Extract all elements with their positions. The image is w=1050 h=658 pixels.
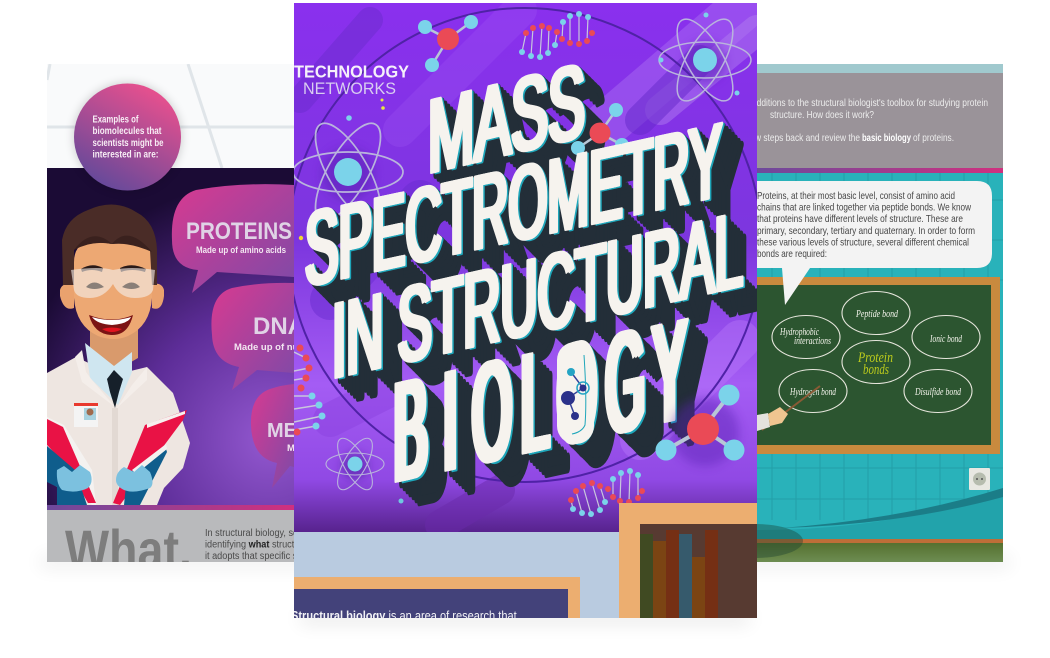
panel: center cover page xyxy=(288,3,764,623)
title line: MASS: MASS xyxy=(431,43,588,196)
bond labels: Hydrogen bond xyxy=(789,386,836,398)
DNA helix: left xyxy=(294,344,326,436)
ID badge xyxy=(74,403,98,427)
speech bubble text panel: Proteins, at their most basic level, consist of amino acid xyxy=(757,191,955,202)
title: Mass Spectrometry in Structural Biology xyxy=(304,38,764,538)
title line: MASS: MASS xyxy=(429,42,586,195)
title line: IN STRUCTURAL xyxy=(330,185,764,427)
circle callout: biomolecules that xyxy=(92,126,162,137)
speech bubble: proteins: PROTEINS xyxy=(186,218,292,245)
speech bubble text panel: primary, secondary, tertiary and quaternary. In order to form xyxy=(757,226,975,237)
neck xyxy=(90,330,138,366)
title line: BIOLOGY: BIOLOGY xyxy=(412,308,704,530)
speech bubble: DNA xyxy=(211,282,294,390)
speech bubble: membranes: Made xyxy=(287,443,311,454)
speech bubble text panel: these various levels of structure, several different chemical xyxy=(757,238,969,248)
title line: BIOLOGY: BIOLOGY xyxy=(398,291,691,513)
coat collar xyxy=(75,350,115,407)
speech bubble: DNA: DNA xyxy=(253,313,305,340)
bond labels xyxy=(779,308,962,398)
title line: MASS: MASS xyxy=(446,60,603,213)
card shadows xyxy=(40,556,1010,624)
safety glasses xyxy=(71,268,155,298)
title line: MASS: MASS xyxy=(427,43,584,196)
lower wall xyxy=(294,532,757,618)
title line: BIOLOGY: BIOLOGY xyxy=(403,299,695,521)
intro text: In structural biology, scientists are interested in xyxy=(205,527,394,539)
large orbit ring xyxy=(288,8,762,482)
circle callout xyxy=(74,84,181,190)
intro text: it adopts that specific structure xyxy=(205,550,329,562)
title line: MASS: MASS xyxy=(437,51,594,205)
lab ceiling background xyxy=(47,64,294,169)
bond ellipses xyxy=(772,292,980,412)
title line: MASS: MASS xyxy=(449,63,606,216)
atom: top right xyxy=(658,11,751,109)
left open book xyxy=(47,417,96,505)
intro text: identifying what structure a molecule has and why xyxy=(205,539,408,551)
title line: BIOLOGY: BIOLOGY xyxy=(409,305,701,527)
title line: BIOLOGY: BIOLOGY xyxy=(394,290,686,512)
small decorative dots xyxy=(299,98,404,504)
purple cover background xyxy=(294,3,757,533)
ears xyxy=(60,284,164,309)
speech bubble text panel xyxy=(740,181,992,305)
scientist character xyxy=(47,204,190,505)
speech bubble text panel: bonds are required: xyxy=(757,249,827,260)
molecule: bottom right xyxy=(656,384,744,466)
eyes xyxy=(86,282,140,289)
atom: left xyxy=(293,114,403,230)
logo: Technology Networks: TECHNOLOGY xyxy=(294,62,409,82)
pointer and hand xyxy=(757,386,820,431)
grey intro band xyxy=(757,73,1003,168)
circle callout: scientists might be xyxy=(92,138,164,149)
mouth xyxy=(89,315,133,335)
blackboard frame xyxy=(294,577,580,618)
logo: Technology Networks: NETWORKS xyxy=(303,79,396,98)
intro text: of proteins. xyxy=(913,133,954,144)
hair xyxy=(62,204,157,285)
panel: right page xyxy=(757,64,1003,562)
atom: small lower left xyxy=(326,433,384,495)
intro text: additions to the structural biologist's toolbox for studying protein xyxy=(752,98,988,109)
shirt and tie xyxy=(85,343,132,405)
blackboard xyxy=(757,277,1000,454)
speech bubble: DNA: Made up of nucleotides xyxy=(234,342,340,353)
molecule: top xyxy=(418,15,478,72)
title line: BIOLOGY: BIOLOGY xyxy=(415,311,707,533)
intro text: basic biology xyxy=(862,133,911,144)
gradient strip xyxy=(757,168,1003,173)
circle callout: interested in are: xyxy=(92,150,158,160)
purple stage background xyxy=(47,168,294,505)
title line: SPECTROMETRY xyxy=(304,98,743,335)
bond labels: bonds xyxy=(863,362,889,378)
grey intro band xyxy=(47,510,294,562)
bond labels: Disulfide bond xyxy=(914,386,961,398)
molecule: middle xyxy=(571,103,629,155)
panel: left page xyxy=(47,64,294,562)
title line: MASS: MASS xyxy=(434,49,591,202)
speech bubble: proteins: Made up of amino acids xyxy=(196,245,286,256)
wall socket xyxy=(969,468,990,490)
tiled classroom wall xyxy=(757,173,1003,540)
title line: BIOLOGY: BIOLOGY xyxy=(406,302,698,524)
right open book xyxy=(113,410,187,505)
bond labels: Ionic bond xyxy=(929,333,962,345)
lab coat xyxy=(47,357,190,505)
title line: BIOLOGY: BIOLOGY xyxy=(391,291,683,512)
title line: BIOLOGY: BIOLOGY xyxy=(397,290,689,511)
title line: MASS: MASS xyxy=(431,46,588,199)
DNA helix: top xyxy=(519,11,595,60)
bond labels: Hydrophobic xyxy=(779,326,819,338)
intro text: few steps back and review the xyxy=(748,133,860,144)
speech bubble: membranes xyxy=(251,384,294,488)
logo: Technology Networks xyxy=(294,62,409,98)
speech bubble text panel: that proteins have different levels of structure. These are xyxy=(757,214,963,225)
intro text xyxy=(748,98,988,144)
diagonal background bands xyxy=(300,10,757,525)
bond labels: Protein xyxy=(857,350,893,366)
bond labels: interactions xyxy=(794,335,831,347)
DNA helix: bottom xyxy=(568,468,645,517)
title line: BIOLOGY: BIOLOGY xyxy=(400,296,692,518)
gloved hands xyxy=(57,465,152,492)
intro text: structural biology: Structural biology is an area of research that xyxy=(291,608,517,623)
speech bubble: membranes: MEMBRANES xyxy=(267,420,398,442)
intro text xyxy=(206,528,294,561)
intro text: structure. How does it work? xyxy=(770,110,874,121)
top teal band xyxy=(757,64,1003,73)
face xyxy=(74,238,152,339)
title line: MASS: MASS xyxy=(440,54,597,207)
heading: What: What. xyxy=(65,518,192,581)
speech bubble: proteins xyxy=(172,184,294,293)
eyebrows xyxy=(81,265,146,272)
icon: molecule inside letter O xyxy=(557,342,594,444)
title line: MASS: MASS xyxy=(443,57,600,210)
gradient strip xyxy=(47,505,294,510)
floor skirting and floor xyxy=(757,524,1003,562)
speech bubble text panel: chains that are linked together via peptide bonds. We know xyxy=(757,202,971,214)
title line: MASS xyxy=(426,38,606,222)
circle callout: Examples of xyxy=(92,115,139,126)
title line: BIOLOGY: BIOLOGY xyxy=(397,293,689,515)
bookshelf xyxy=(619,503,757,618)
bond labels: Peptide bond xyxy=(855,308,898,320)
